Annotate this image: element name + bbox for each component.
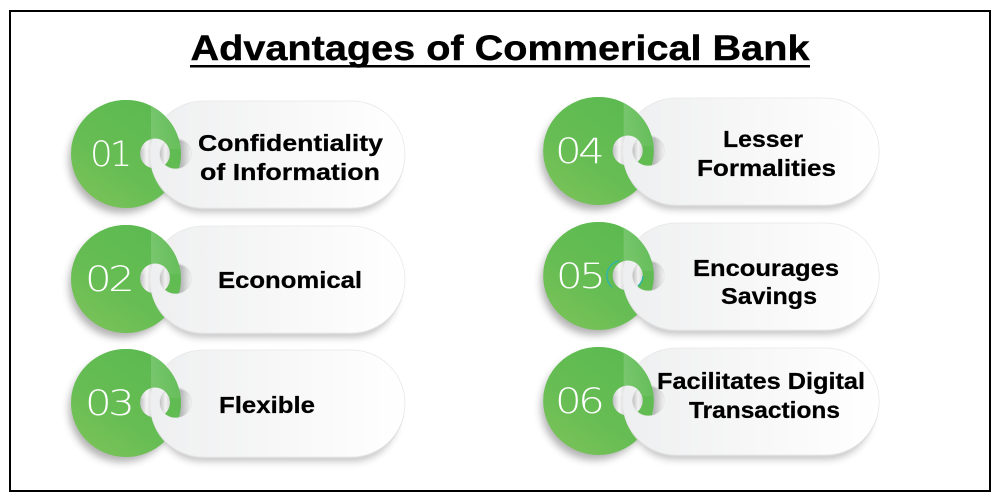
item 05: Encourages Savings: 05	[556, 256, 602, 297]
title: Advantages of Commerical Bank	[190, 29, 810, 68]
item 03: Flexible: Flexible	[219, 392, 315, 418]
item 04: Lesser Formalities	[541, 95, 879, 210]
item 05: Encourages Savings: Savings	[721, 283, 817, 309]
item 04: Lesser Formalities: 04	[555, 131, 602, 172]
item 01: Confidentiality of Information	[69, 98, 405, 213]
item 06: Facilitates Digital Transactions: Transactions	[689, 397, 840, 423]
item 05: Encourages Savings: Encourages	[693, 255, 839, 281]
item 04: Lesser Formalities: Formalities	[697, 155, 836, 181]
item 06: Facilitates Digital Transactions: 06	[555, 381, 602, 422]
item 02: Economical: 02	[85, 259, 131, 300]
item 06: Facilitates Digital Transactions	[541, 345, 879, 460]
item 01: Confidentiality of Information: of Information	[200, 159, 380, 185]
item 05: Encourages Savings	[541, 220, 879, 335]
item 04: Lesser Formalities: Lesser	[723, 126, 803, 152]
item 03: Flexible: 03	[85, 383, 131, 424]
item 02: Economical	[69, 223, 405, 338]
item 06: Facilitates Digital Transactions: Facilitates Digital	[657, 368, 865, 394]
item 03: Flexible	[69, 347, 405, 462]
item 02: Economical: Economical	[218, 267, 362, 293]
item 01: Confidentiality of Information: Confidentiality	[198, 130, 383, 156]
item 01: Confidentiality of Information: 01	[90, 134, 129, 175]
teal hole accent	[607, 261, 643, 287]
